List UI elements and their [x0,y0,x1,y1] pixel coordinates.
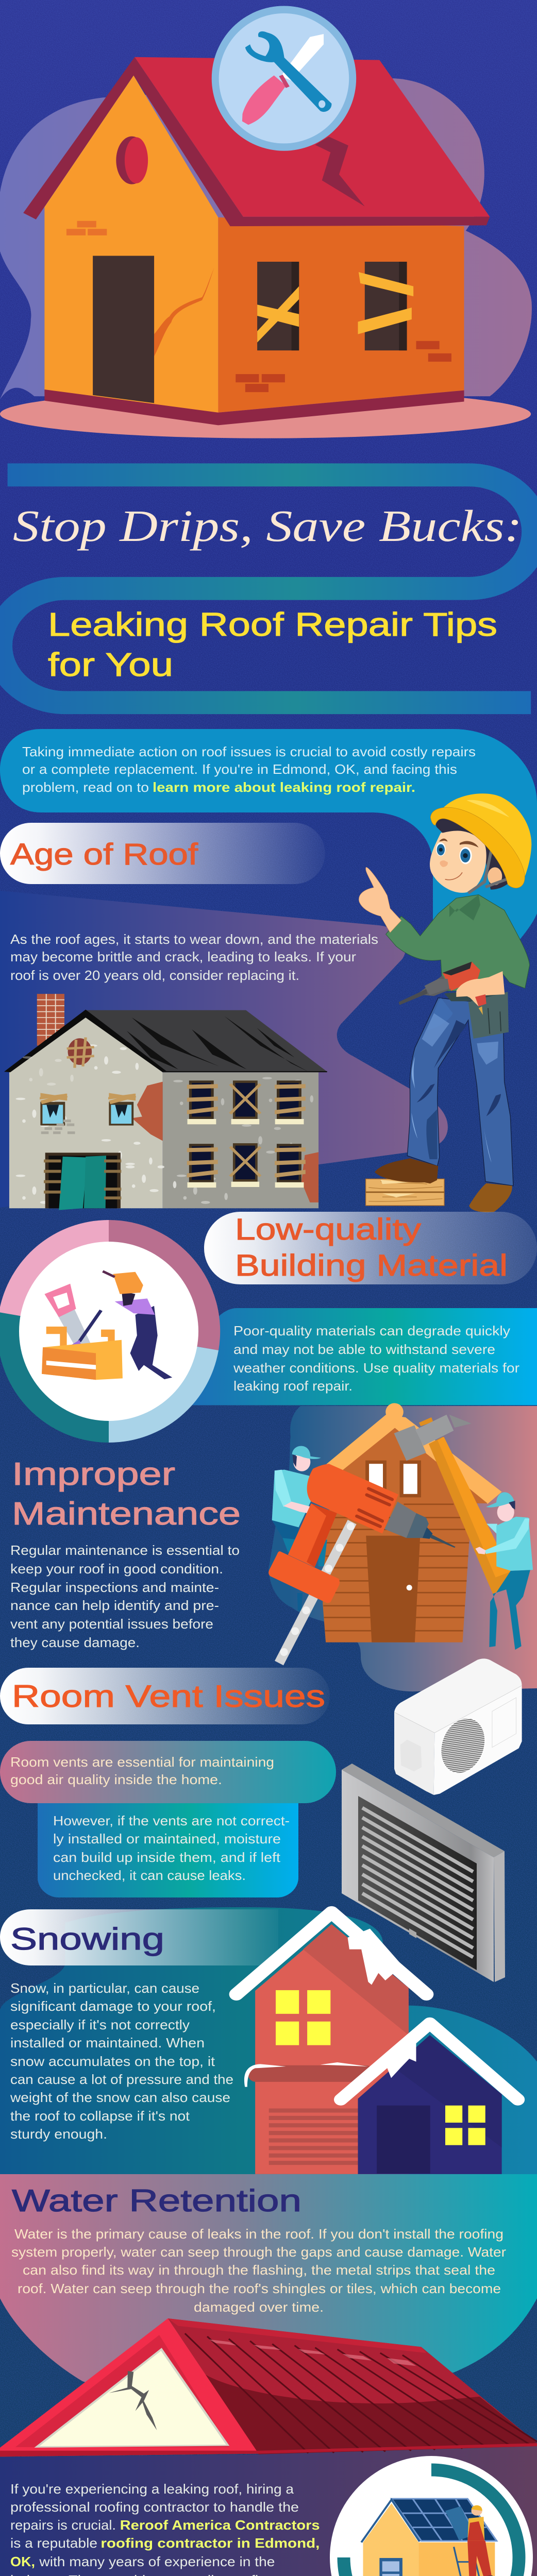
text: low-quality paragraph [233,1323,519,1394]
text: age of roof paragraph: may become brittle and crack, leading to leaks. If your [10,949,356,964]
text: maintenance paragraph: Regular inspections and mainte- [10,1580,219,1595]
donut badge with toolbox [0,1220,220,1443]
subtitle: Leaking Roof Repair Tips for You: for You [48,646,173,683]
text: snowing paragraph: especially if it's not correctly [10,2017,190,2032]
text: low-quality paragraph: and may not be able to withstand severe [233,1342,495,1357]
heading pill: Age of Roof: Age of Roof [10,838,198,871]
text: conclusion paragraph: professional roofing contractor to handle the [10,2499,299,2515]
heading pill: Low-quality Building Material: Low-quality [235,1213,421,1246]
hard hat [430,793,531,888]
illustration: red metal roof with cracked gable [0,2318,537,2456]
boarded windows [187,1080,306,1188]
background blob: snowing section [0,1907,537,2176]
text: snowing paragraph: installed or maintained. When [10,2035,205,2050]
text: intro paragraph: problem, read on to [22,779,149,795]
roof [86,1010,327,1072]
text: water retention paragraph: Water is the primary cause of leaks in the roof. If you don't install the roofing [14,2226,504,2242]
text: conclusion paragraph: Reroof America Contractors [120,2517,320,2533]
house with solar roof [361,2499,497,2576]
heading pill: Low-quality Building Material [204,1212,537,1284]
icon: toolbox and saw [42,1284,123,1380]
text: age of roof paragraph: As the roof ages, it starts to wear down, and the materials [10,931,378,947]
heading pill: Snowing [0,1909,278,1965]
plaster wear [16,1044,313,1204]
text: maintenance paragraph: Regular maintenance is essential to [10,1543,240,1558]
bricks patches [132,1082,163,1141]
text: water retention paragraph: system properly, water can seep through the gaps and cause damage. Water [11,2244,506,2260]
left worker [272,1446,327,1611]
chimney [37,994,64,1046]
boarded door [44,1153,121,1210]
background shape: mauve diagonal band [0,891,448,1208]
illustration: air conditioning unit [394,1658,522,1795]
wooden beam and hammer [394,1415,516,1594]
round attic window [67,1038,94,1068]
subtitle: Leaking Roof Repair Tips for You [48,606,497,683]
drill [417,962,480,996]
small windows [40,1093,137,1126]
text: water retention paragraph: roof. Water can seep through the roof's shingles or tiles, which can become [18,2281,501,2296]
panel: conclusion background [0,2443,537,2576]
text: snowing paragraph: significant damage to your roof, [10,1998,216,2014]
text: age of roof paragraph: roof is over 20 years old, consider replacing it. [10,968,299,983]
text: water retention paragraph: can also find its way in through the flashing, the metal strips that seal the [23,2262,495,2278]
icon: wrench and screwdriver badge [212,6,356,151]
ground ellipse [0,390,531,438]
text: conclusion paragraph [10,2481,320,2576]
blue house [341,2023,518,2174]
subtitle: Leaking Roof Repair Tips for You: Leaking Roof Repair Tips [48,606,497,643]
text: water retention paragraph: damaged over time. [194,2299,324,2315]
text: conclusion paragraph: is a reputable [10,2535,97,2551]
text: snowing paragraph: sturdy enough. [10,2126,107,2142]
panel: room vents detail: ly installed or maintained, moisture [53,1831,281,1846]
jeans [407,998,513,1186]
head [430,816,516,893]
text: age of roof paragraph [10,931,378,983]
text: snowing paragraph: weight of the snow can also cause [10,2090,230,2105]
ribbon banner behind title [0,475,535,703]
heading: Water Retention: Water Retention [12,2183,301,2218]
text: intro paragraph: learn more about leaking roof repair. [153,779,415,795]
text: snowing paragraph: the roof to collapse if it's not [10,2108,190,2124]
text: intro paragraph [22,744,476,795]
illustration: workers building wooden house [268,1403,533,1663]
text: maintenance paragraph: keep your roof in good condition. [10,1561,223,1577]
panel: intro [0,729,537,939]
text: snowing paragraph: snow accumulates on the top, it [10,2054,215,2069]
text: maintenance paragraph: vent any potential issues before [10,1616,213,1632]
giant drill [268,1464,456,1603]
right worker [475,1492,533,1650]
shirt [386,895,530,991]
background blob [0,78,532,399]
text: water retention paragraph [11,2226,506,2315]
text: snowing paragraph [10,1980,233,2142]
roof trim [322,1403,502,1504]
holding hand lower [456,979,502,1006]
text: snowing paragraph: can cause a lot of pressure and the [10,2072,233,2087]
text: low-quality paragraph: Poor-quality materials can degrade quickly [233,1323,510,1338]
panel: room vents intro [0,1741,336,1803]
holding hand [456,971,505,997]
text: conclusion paragraph: roofing contractor in Edmond, [100,2535,320,2551]
figure: worker carrying drill [103,1272,172,1379]
title: Stop Drips, Save Bucks: Stop Drips, Save Bucks: [13,501,522,551]
text: intro paragraph: Taking immediate action on roof issues is crucial to avoid costly repairs [22,744,476,759]
drill bit and chuck [399,979,468,1005]
text: low-quality paragraph: leaking roof repair. [233,1378,353,1394]
badge: roofer installing solar panels [330,2456,533,2576]
panel: room vents detail: unchecked, it can cause leaks. [53,1868,246,1883]
ladder [279,1522,355,1663]
heading: Improper Maintenance: Maintenance [12,1496,241,1532]
wooden house [323,1428,488,1642]
hero illustration: damaged house with tools badge [0,6,532,438]
text: conclusion paragraph: repairs is crucial. [10,2517,116,2533]
tool pouch [444,988,509,1039]
panel: low-quality paragraph background [191,1308,537,1405]
background blob: maintenance scene [268,1406,537,1691]
text: low-quality paragraph: weather conditions. Use quality materials for [233,1360,519,1376]
text: maintenance paragraph: nance can help identify and pre- [10,1598,219,1613]
wood blocks [366,1179,444,1206]
panel: room vents detail: can build up inside them, and if left [53,1850,281,1865]
text: conclusion paragraph: with many years of experience in the [39,2554,275,2569]
panel: water retention [0,2174,537,2421]
illustration: wall vent grille [342,1764,505,1982]
heading: Improper Maintenance [12,1456,241,1532]
text: conclusion paragraph: OK, [10,2554,35,2569]
heading: Improper Maintenance: Improper [12,1456,175,1492]
panel: room vents intro: good air quality inside the home. [10,1772,222,1787]
house body [23,57,490,425]
text: snowing paragraph: Snow, in particular, can cause [10,1980,199,1996]
illustration: worker with drill [359,793,531,1212]
text: maintenance paragraph [10,1543,240,1650]
heading pill: Room Vent Issues: Room Vent Issues [12,1679,325,1714]
heading pill: Room Vent Issues [0,1668,330,1724]
text: intro paragraph: or a complete replacement. If you're in Edmond, OK, and facing this [22,761,457,777]
illustration: boarded up old house [4,994,327,1210]
text: conclusion paragraph: If you're experiencing a leaking roof, hiring a [10,2481,294,2497]
panel: room vents detail: However, if the vents are not correct- [53,1813,290,1828]
stone rubble [41,1120,75,1134]
panel: room vents intro: Room vents are essential for maintaining [10,1754,274,1770]
panel: room vents detail [38,1803,298,1897]
donut ring segments [0,1220,220,1443]
heading pill: Low-quality Building Material: Building Material [235,1249,508,1282]
illustration: snowy houses [237,1912,518,2174]
roofer on ladder [445,2505,493,2576]
shoes [375,1158,438,1183]
heading pill: Snowing: Snowing [10,1922,164,1956]
heading pill: Age of Roof [0,823,325,884]
red house [237,1912,426,2174]
arm and pointing hand [359,867,401,933]
text: maintenance paragraph: they cause damage. [10,1635,140,1650]
